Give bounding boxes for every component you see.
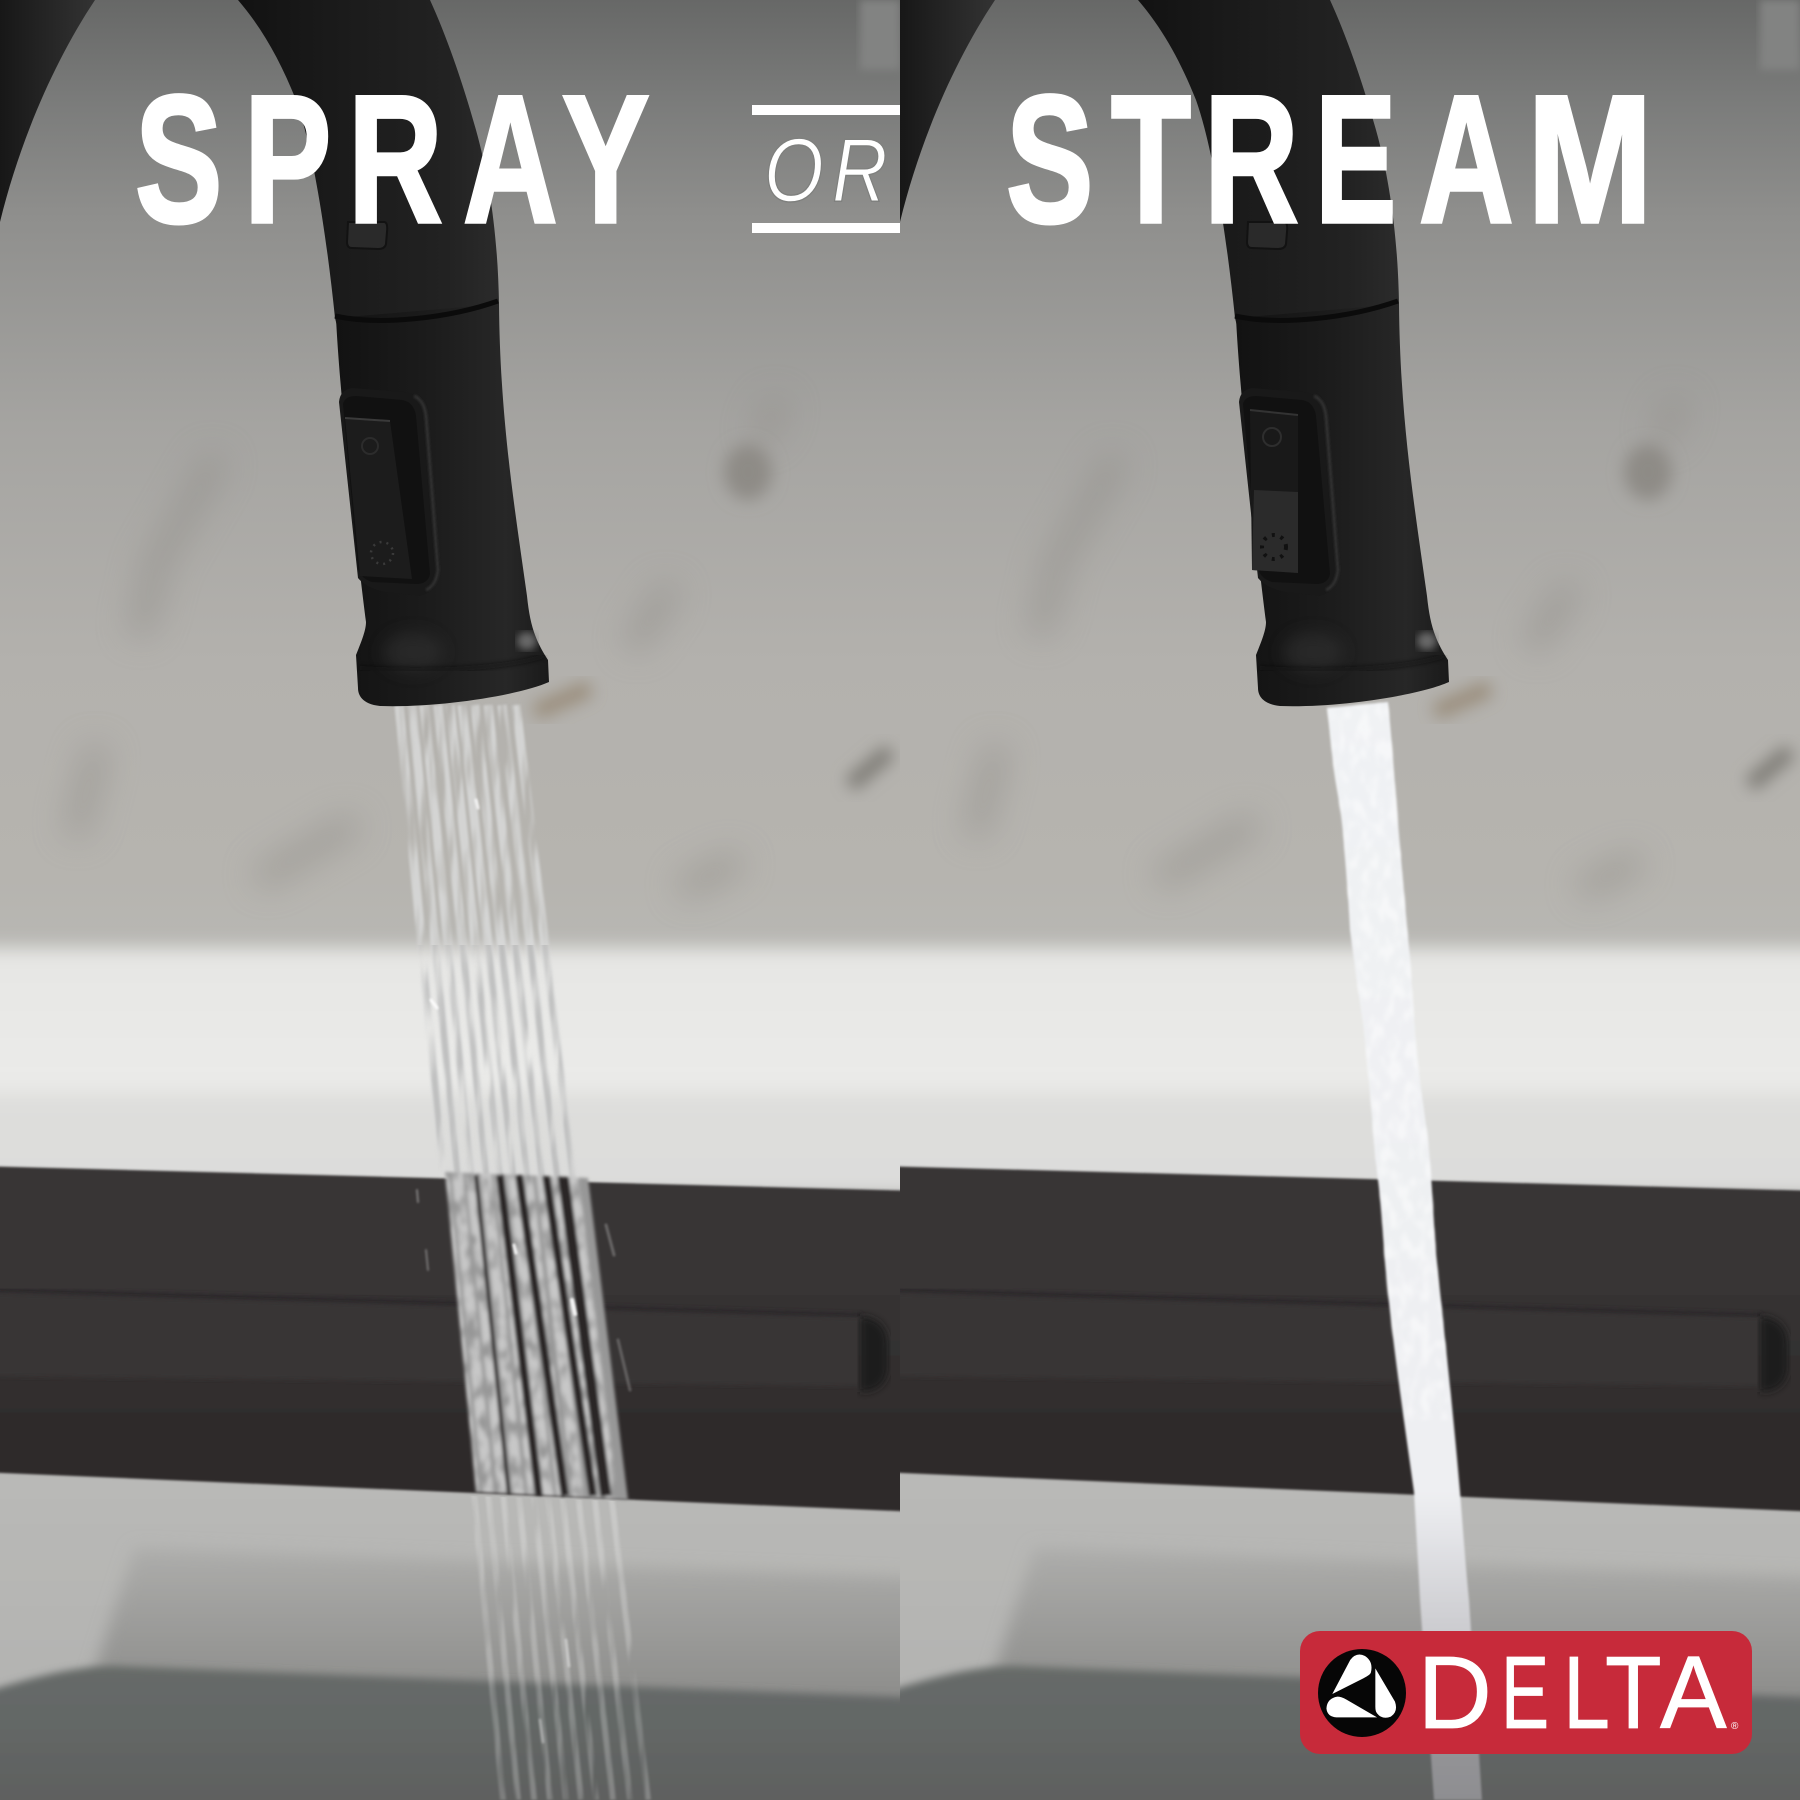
background: kitchen scene [0,0,940,1800]
title: SPRAY: A [463,57,558,261]
logo wordmark: ® [1731,1721,1739,1732]
title: SPRAY: Y [562,57,649,261]
divider: OR label: OR [764,119,887,220]
title: SPRAY [135,57,649,261]
logo wordmark: A [1660,1635,1727,1750]
title: STREAM: T [1111,57,1191,261]
button: spray selected [345,418,412,579]
icon: Delta triangle mark [1318,1649,1406,1737]
background: kitchen scene [860,0,1800,1800]
button: stream selected [1250,410,1298,573]
logo wordmark: D [1418,1635,1492,1750]
title: SPRAY: R [348,57,443,261]
title: STREAM: S [1006,57,1093,261]
faucet: stream side [900,0,1449,706]
logo wordmark: L [1563,1635,1610,1750]
logo wordmark: T [1605,1634,1662,1750]
title: STREAM: E [1315,58,1396,261]
title: STREAM [1006,57,1653,261]
water: spray jets [399,705,648,1800]
water: solid stream [1327,702,1482,1800]
title: SPRAY: S [135,57,222,261]
title: STREAM: A [1419,57,1514,261]
logo: Delta [1300,1631,1752,1754]
logo wordmark [1418,1634,1739,1750]
panel: spray [0,0,940,1800]
logo wordmark: E [1501,1635,1549,1750]
panel: stream [860,0,1800,1800]
title: STREAM: M [1527,59,1653,261]
title: SPRAY: P [244,57,331,261]
title: STREAM: R [1204,57,1299,261]
faucet: spray side [0,0,549,706]
divider: OR label [752,105,900,233]
